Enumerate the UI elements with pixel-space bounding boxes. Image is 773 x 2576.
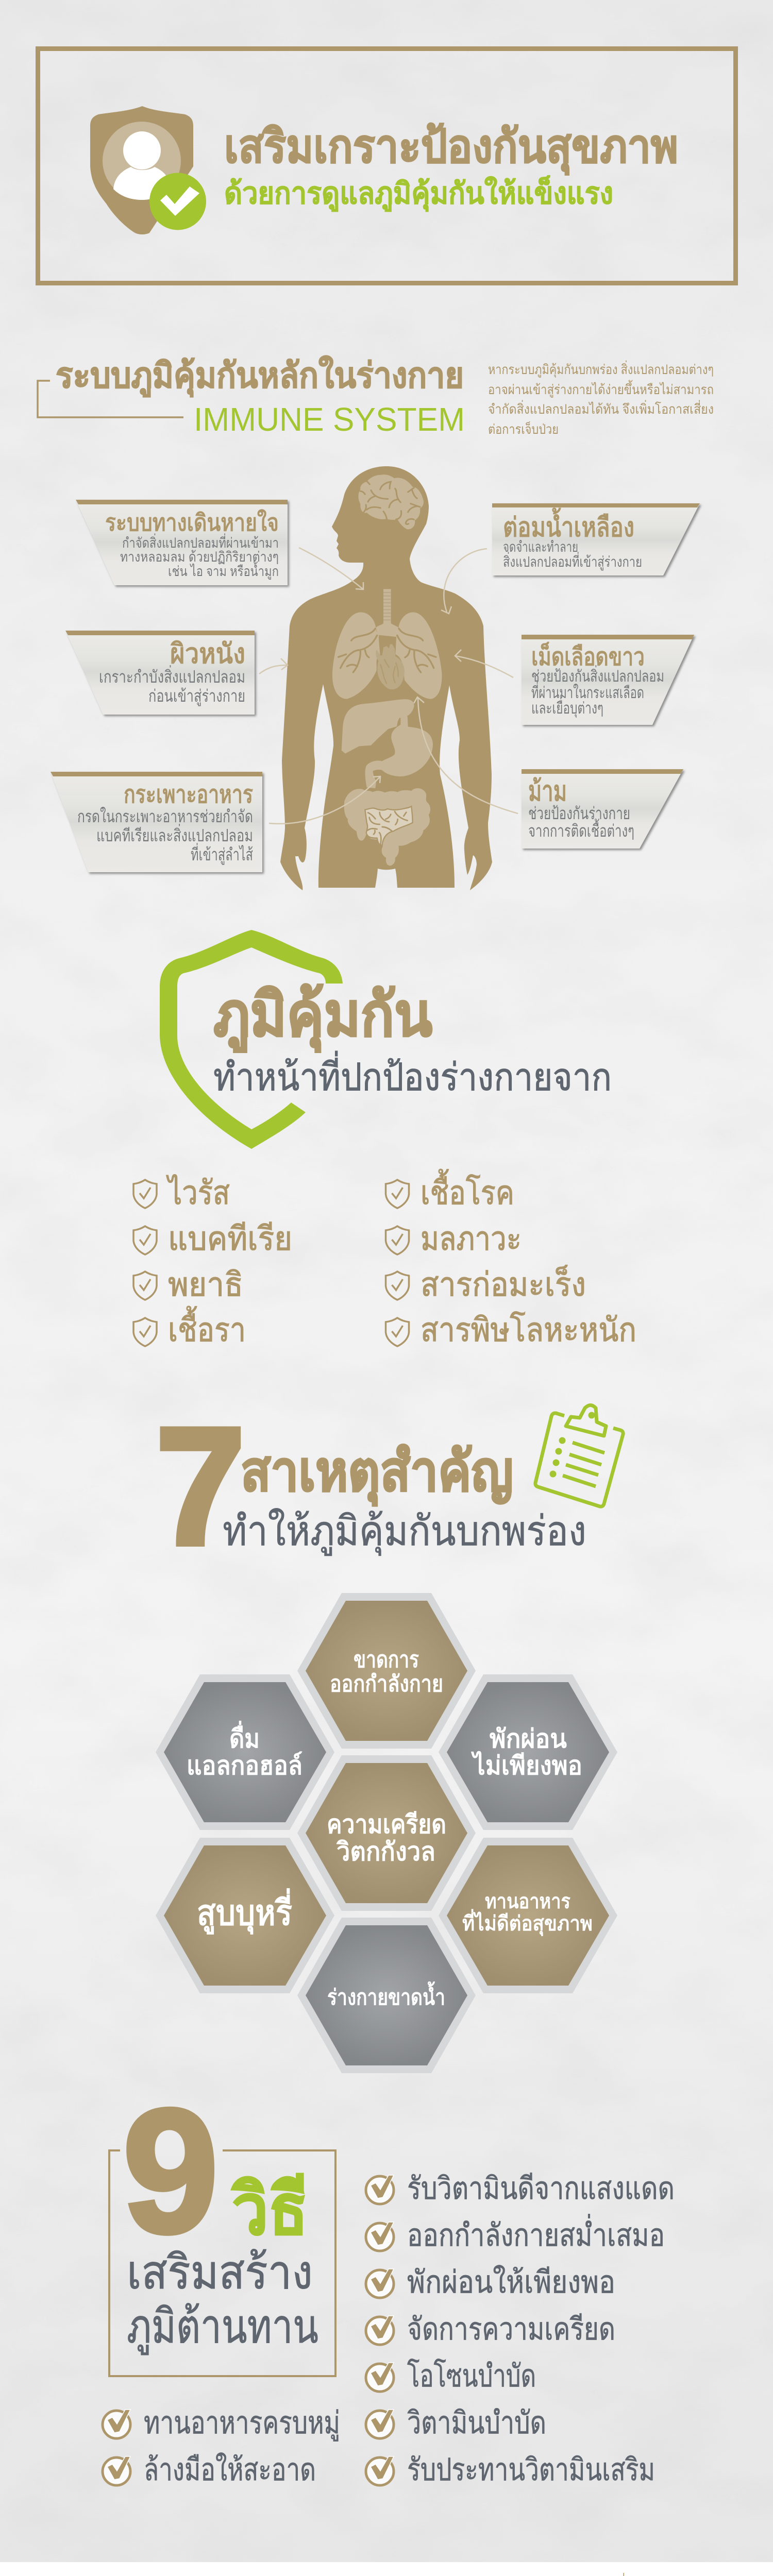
item: fungus (133, 1306, 246, 1348)
hexagon: lack of exercise (297, 1593, 476, 1749)
item: pollution: มลภาวะ (421, 1220, 522, 1257)
item: parasite (133, 1266, 243, 1303)
header panel (38, 48, 736, 283)
box frame (109, 2150, 335, 2376)
hexagon: smoking (156, 1838, 334, 1993)
title: เสริมเกราะป้องกันสุขภาพ (224, 121, 678, 176)
item 8 (103, 2405, 340, 2442)
item: germs (385, 1169, 514, 1211)
card shape (67, 632, 256, 716)
description: สิ่งแปลกปลอมที่เข้าสู่ร่างกาย (503, 552, 642, 571)
heading: ม้าม (528, 776, 567, 807)
item 8: ทานอาหารครบหมู่ (144, 2405, 340, 2442)
item 6: วิตามินบำบัด (407, 2405, 546, 2440)
hexagon: alcohol: แอลกอฮอล์ (187, 1751, 303, 1780)
item 5: โอโซนบำบัด (407, 2358, 536, 2393)
description: จากการติดเชื้อต่างๆ (528, 819, 634, 840)
intro paragraph: อาจผ่านเข้าสู่ร่างกายได้ง่ายขึ้นหรือไม่สามารถ (488, 380, 714, 398)
item 4: จัดการความเครียด (407, 2312, 615, 2346)
hexagon: lack of exercise: ขาดการ (354, 1647, 419, 1672)
hexagon: dehydration (297, 1918, 476, 2073)
card shape (494, 505, 701, 577)
pointer arrows (259, 548, 518, 824)
arrow: white blood cells (455, 650, 513, 677)
organ: intestines (344, 788, 430, 866)
description (531, 665, 664, 718)
item: fungus: เชื้อรา (168, 1306, 246, 1348)
section: nine ways (103, 2073, 675, 2487)
description: ทางหลอมลม ด้วยปฏิกิริยาต่างๆ (120, 549, 279, 565)
item: carcinogens: สารก่อมะเร็ง (421, 1265, 586, 1303)
item: germs: เชื้อโรค (421, 1169, 514, 1211)
icon: green shield outline (160, 930, 343, 1149)
panel: stomach (51, 772, 264, 874)
card shape (523, 636, 696, 726)
intro paragraph: จำกัดสิ่งแปลกปลอมได้ทัน จึงเพิ่มโอกาสเสี่ยง (488, 400, 714, 417)
heading: เม็ดเลือดขาว (531, 641, 645, 671)
description: ที่ผ่านมาในกระแสเลือด (531, 682, 644, 702)
subheading: ทำหน้าที่ปกป้องร่างกายจาก (213, 1050, 612, 1098)
description (528, 804, 634, 840)
item 9 (103, 2452, 316, 2487)
description (120, 533, 279, 580)
hexagon: alcohol: ดื่ม (229, 1721, 260, 1753)
icon: clipboard (535, 1405, 623, 1506)
header frame (38, 48, 736, 283)
card shape (77, 501, 289, 587)
item 3: พักผ่อนให้เพียงพอ (407, 2265, 615, 2299)
section: seven causes heading (156, 1394, 623, 1579)
organ: liver (342, 699, 414, 754)
hexagon: stress (297, 1755, 476, 1911)
arrow: spleen (414, 697, 518, 814)
panel: white blood cells (522, 635, 696, 726)
section: immune function (133, 930, 636, 1348)
hexagon: alcohol (156, 1674, 334, 1830)
arrow: skin (259, 658, 288, 674)
item: parasite: พยาธิ (168, 1266, 243, 1303)
panel: skin (65, 631, 256, 716)
footer band (0, 2562, 773, 2576)
item 2: ออกกำลังกายสม่ำเสมอ (407, 2214, 665, 2252)
hexagon: unhealthy food: ที่ไม่ดีต่อสุขภาพ (462, 1909, 593, 1937)
hexagon: unhealthy food (439, 1838, 617, 1993)
description (503, 539, 642, 571)
arrow: respiratory (299, 548, 363, 589)
item: virus (133, 1174, 230, 1211)
description: ก่อนเข้าสู่ร่างกาย (148, 686, 245, 706)
subheading: ทำให้ภูมิคุ้มกันบกพร่อง (223, 1507, 586, 1556)
organ: lungs and heart (332, 589, 442, 699)
organ: brain (358, 474, 424, 529)
panel: spleen (522, 769, 685, 850)
hexagon: unhealthy food: ทานอาหาร (485, 1890, 570, 1913)
hexagon: insufficient rest: ไม่เพียงพอ (470, 1751, 582, 1780)
heading: สาเหตุสำคัญ (241, 1440, 513, 1506)
item: virus: ไวรัส (166, 1174, 230, 1211)
number 9: 9 (123, 2073, 219, 2269)
description (77, 807, 253, 865)
arrow: lymph (441, 549, 487, 614)
heading: ระบบทางเดินหายใจ (105, 509, 279, 536)
description: ที่เข้าสู่ลำไส้ (191, 843, 253, 865)
hexagon diagram: seven causes (156, 1593, 617, 2073)
item 5 (366, 2358, 536, 2393)
section: immune system heading (38, 355, 714, 438)
number 7: 7 (156, 1394, 245, 1579)
intro paragraph: ต่อการเจ็บป่วย (488, 421, 559, 437)
heading line 2: เสริมสร้าง (127, 2246, 313, 2299)
heading line 3: ภูมิต้านทาน (127, 2300, 318, 2355)
subtitle: ด้วยการดูแลภูมิคุ้มกันให้แข็งแรง (224, 175, 613, 212)
description: เช่น ไอ จาม หรือน้ำมูก (168, 561, 279, 580)
list: threats (133, 1169, 636, 1348)
item: pollution (385, 1220, 522, 1257)
card shape (523, 771, 685, 850)
description: กำจัดสิ่งแปลกปลอมที่ผ่านเข้ามา (122, 533, 279, 551)
hexagon: dehydration: ร่างกายขาดน้ำ (327, 1981, 445, 2009)
human body figure (280, 466, 492, 890)
item 7: รับประทานวิตามินเสริม (407, 2452, 655, 2487)
item: bacteria: แบคทีเรีย (168, 1220, 292, 1257)
icon: shield with person and check (90, 106, 206, 234)
list: nine ways (103, 2171, 675, 2487)
hexagon: insufficient rest: พักผ่อน (490, 1724, 567, 1753)
panel: respiratory system (76, 500, 289, 587)
description: แบคทีเรียและสิ่งแปลกปลอม (96, 824, 253, 845)
intro paragraph: หากระบบภูมิคุ้มกันบกพร่อง สิ่งแปลกปลอมต่างๆ (488, 360, 714, 378)
heading: กระเพาะอาหาร (124, 781, 253, 808)
panel: lymph nodes (492, 503, 701, 577)
arrow: stomach (269, 776, 380, 824)
heading: ภูมิคุ้มกัน (213, 981, 432, 1053)
item 2 (366, 2214, 665, 2252)
description: เกราะกำบังสิ่งแปลกปลอม (99, 665, 245, 686)
heading english: IMMUNE SYSTEM (194, 401, 465, 438)
item: heavy metals: สารพิษโลหะหนัก (421, 1311, 636, 1348)
description: ช่วยป้องกันร่างกาย (528, 804, 630, 823)
heading: ways: วิธี (231, 2171, 308, 2249)
hexagon: lack of exercise: ออกกำลังกาย (330, 1671, 443, 1697)
item 6 (366, 2405, 546, 2440)
description: จดจำและทำลาย (503, 539, 578, 555)
description: กรดในกระเพาะอาหารช่วยกำจัด (77, 807, 253, 826)
hexagon: stress: ความเครียด (327, 1810, 446, 1839)
heading: ต่อมน้ำเหลือง (503, 507, 634, 543)
description: ช่วยป้องกันสิ่งแปลกปลอม (531, 665, 664, 685)
hexagon: smoking: สูบบุหรี่ (197, 1888, 292, 1935)
footer (0, 2562, 773, 2576)
item 9: ล้างมือให้สะอาด (144, 2452, 316, 2487)
bracket (38, 381, 183, 417)
heading: ผิวหนัง (170, 638, 245, 669)
hexagon: stress: วิตกกังวล (336, 1837, 435, 1866)
card shape (52, 773, 264, 874)
silhouette (280, 466, 492, 890)
item 1: รับวิตามินดีจากแสงแดด (407, 2171, 675, 2206)
organ: stomach (365, 716, 433, 788)
intro paragraph (488, 360, 714, 437)
description (99, 665, 245, 706)
heading thai: ระบบภูมิคุ้มกันหลักในร่างกาย (56, 355, 464, 398)
hexagon: insufficient rest (439, 1674, 617, 1830)
description: และเยื่อบุต่างๆ (531, 697, 603, 718)
